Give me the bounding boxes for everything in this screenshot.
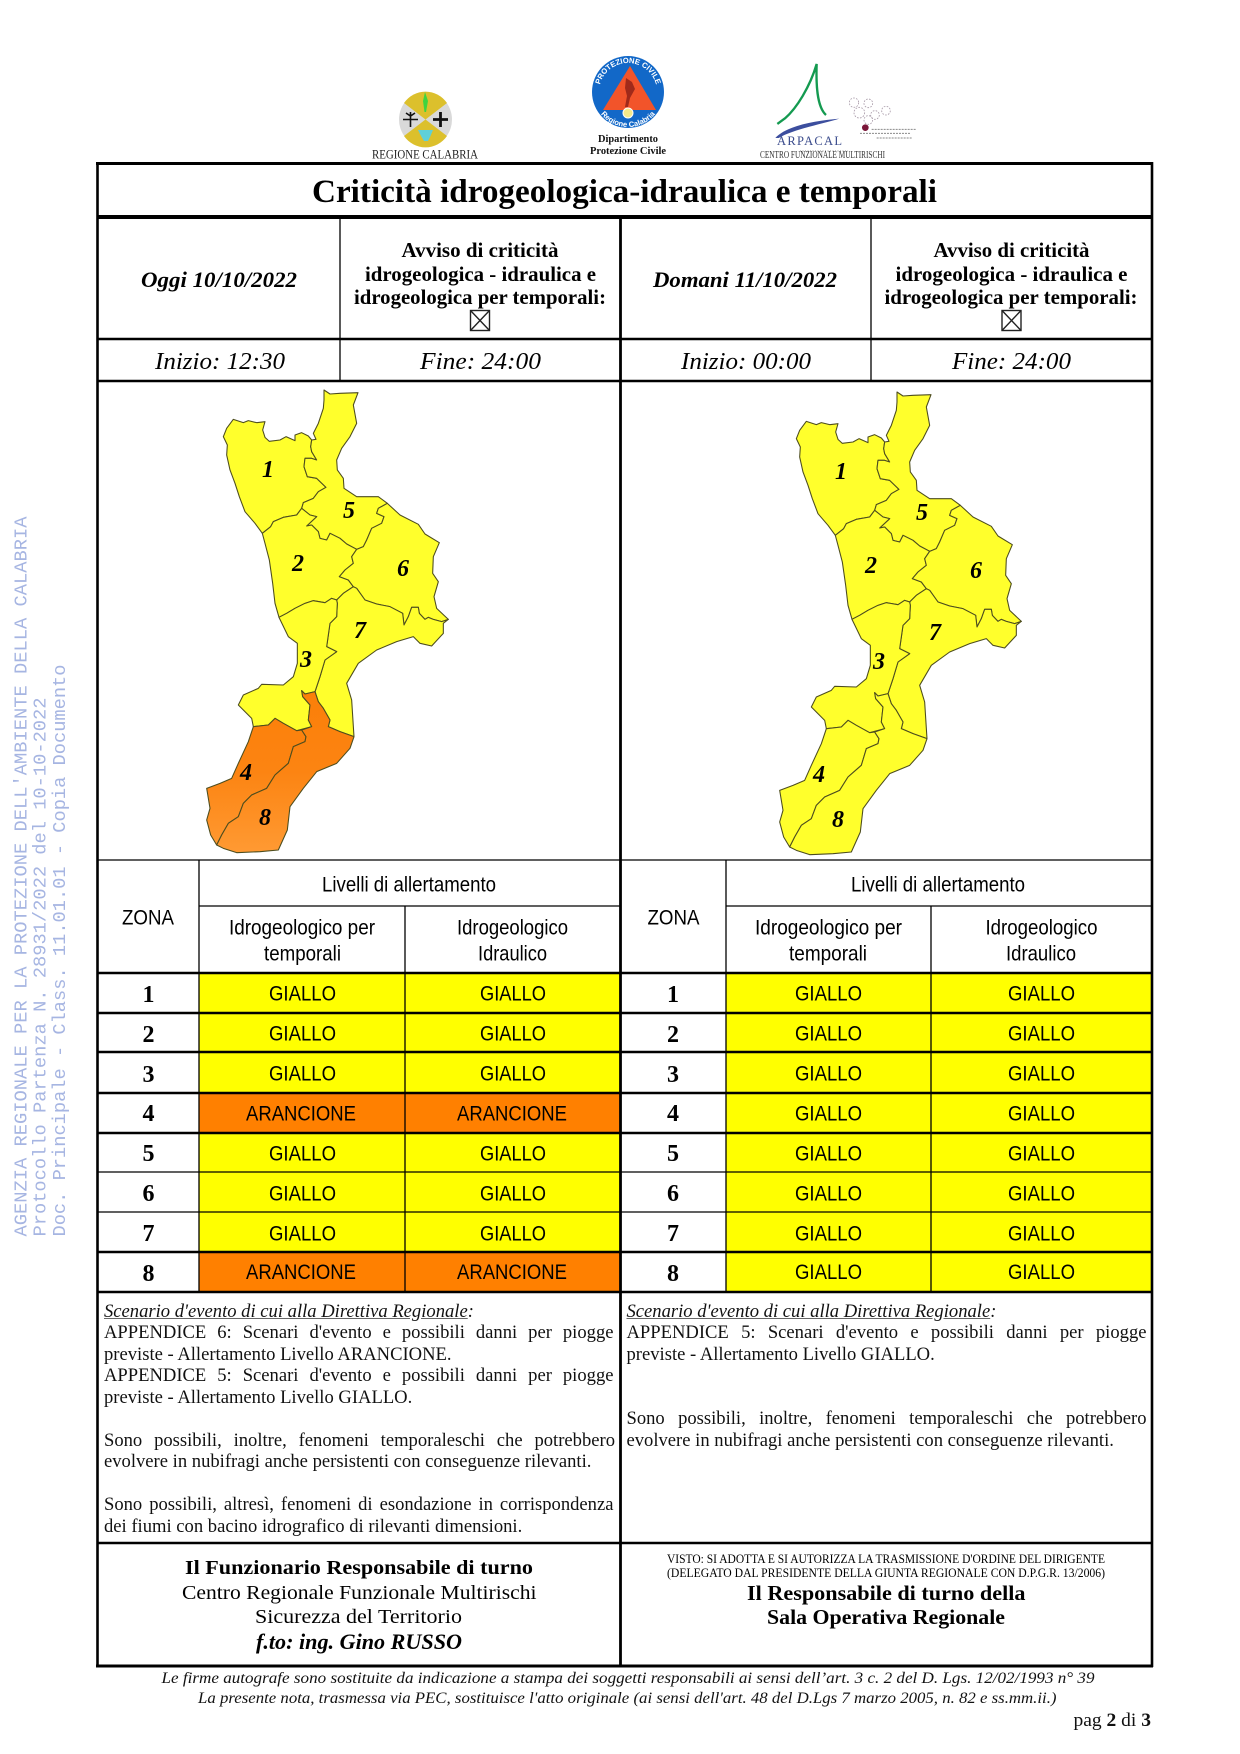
- alert values tomorrow: GIALLO: [795, 1102, 862, 1126]
- icon: checked box tomorrow: [1002, 310, 1021, 330]
- scenario text: today: dei fiumi con bacino idrografico di rilevanti dimensioni.: [104, 1516, 522, 1536]
- alert values tomorrow: GIALLO: [795, 982, 862, 1006]
- alert values today: GIALLO: [269, 1222, 336, 1246]
- signature: left: Centro Regionale Funzionale Multirischi: [182, 1582, 537, 1604]
- scenario text: tomorrow: APPENDICE 5: Scenari d'evento e possibili danni per piogge: [626, 1322, 1146, 1343]
- alert values today: GIALLO: [269, 982, 336, 1006]
- signature: left: Sicurezza del Territorio: [255, 1606, 462, 1628]
- zone numbers tomorrow: 2: [667, 1022, 679, 1048]
- vertical watermark: Protocollo Partenza N. 28931/2022 del 10-10-2022: [30, 698, 52, 1236]
- signature: right: Il Responsabile di turno della: [747, 1581, 1026, 1605]
- end time tomorrow: Fine: 24:00: [951, 349, 1071, 375]
- alert values tomorrow: GIALLO: [1008, 1182, 1075, 1206]
- scenario text: today: Sono possibili, altresì, fenomeni di esondazione in corrispondenza: [104, 1494, 614, 1515]
- table headings today: Livelli di allertamento: [322, 872, 496, 896]
- table headings tomorrow: Idrogeologico per: [755, 916, 902, 940]
- notice tomorrow: idrogeologica - idraulica e: [896, 262, 1128, 286]
- alert values today: GIALLO: [480, 1182, 546, 1206]
- footnote: La presente nota, trasmessa via PEC, sostituisce l'atto originale (ai sensi dell'art. 48 del D.Lgs 7 marzo 2005, n. 82 e ss.mm.ii.): [197, 1690, 1056, 1707]
- alert values today: GIALLO: [480, 1142, 546, 1166]
- alert values today: GIALLO: [480, 1062, 546, 1086]
- alert values today: GIALLO: [480, 1022, 546, 1046]
- panel: header today: [141, 238, 606, 375]
- zone numbers today: 5: [142, 1141, 154, 1167]
- zone numbers today: 8: [142, 1261, 154, 1287]
- signature: left: Il Funzionario Responsabile di turno: [185, 1557, 533, 1579]
- zone numbers today: 7: [142, 1221, 154, 1247]
- alert values today: ARANCIONE: [457, 1260, 567, 1284]
- map: tomorrow: 3: [872, 649, 885, 675]
- notice today: idrogeologica per temporali:: [354, 285, 606, 309]
- map: today: 1: [262, 457, 274, 483]
- alert values tomorrow: GIALLO: [795, 1222, 862, 1246]
- scenario text: today: previste - Allertamento Livello ARANCIONE.: [104, 1344, 452, 1364]
- alert values tomorrow: GIALLO: [1008, 1102, 1075, 1126]
- zone numbers tomorrow: 5: [667, 1141, 679, 1167]
- signature: right: Sala Operativa Regionale: [767, 1605, 1005, 1629]
- table headings today: temporali: [264, 942, 341, 966]
- logo: Protezione Civile: Protezione Civile: [590, 146, 666, 157]
- logo: Regione Calabria: [372, 92, 478, 162]
- scenario text: today: Sono possibili, inoltre, fenomeni temporaleschi che potrebbero: [104, 1430, 615, 1450]
- table headings tomorrow: Idraulico: [1006, 942, 1076, 966]
- start time tomorrow: Inizio: 00:00: [680, 349, 811, 375]
- alert values today: GIALLO: [480, 982, 546, 1006]
- scenario text: today: APPENDICE 5: Scenari d'evento e possibili danni per piogge: [104, 1365, 614, 1386]
- alert values tomorrow: GIALLO: [1008, 1260, 1075, 1284]
- table: today alert levels: [122, 872, 620, 1292]
- alert values today: GIALLO: [269, 1182, 336, 1206]
- panel: header tomorrow: [652, 238, 1138, 375]
- signature: right: VISTO: SI ADOTTA E SI AUTORIZZA LA TRASMISSIONE D'ORDINE DEL DIRIGENTE: [667, 1551, 1105, 1566]
- table headings today: Idrogeologico per: [229, 916, 375, 940]
- zone numbers today: [142, 982, 154, 1287]
- table headings today: Idrogeologico: [457, 916, 568, 940]
- table headings tomorrow: temporali: [789, 942, 867, 966]
- zone numbers tomorrow: 6: [667, 1181, 679, 1207]
- vertical watermark: AGENZIA REGIONALE PER LA PROTEZIONE DELL'AMBIENTE DELLA CALABRIA: [10, 516, 32, 1236]
- map: today: 2: [291, 551, 304, 577]
- notice today: Avviso di criticità: [402, 238, 559, 262]
- map: tomorrow: 7: [929, 620, 942, 646]
- zone numbers today: 1: [142, 982, 154, 1008]
- signature: left: [182, 1557, 537, 1654]
- map: tomorrow: 5: [916, 500, 928, 526]
- date tomorrow: Domani 11/10/2022: [652, 267, 837, 292]
- signature: right: [667, 1551, 1105, 1629]
- map: tomorrow: [780, 392, 1021, 855]
- alert values tomorrow: GIALLO: [795, 1142, 862, 1166]
- zone numbers today: 2: [142, 1022, 154, 1048]
- table headings today: Idraulico: [478, 942, 547, 966]
- zone numbers tomorrow: [667, 982, 679, 1287]
- logo: Protezione Civile: Regione Calabria: [601, 110, 656, 127]
- zone numbers today: 4: [142, 1101, 154, 1127]
- alert values tomorrow: GIALLO: [1008, 1142, 1075, 1166]
- title: Criticità idrogeologica-idraulica e temporali: [312, 174, 937, 210]
- logo: Regione Calabria: REGIONE CALABRIA: [372, 148, 478, 162]
- scenario text: tomorrow: [626, 1300, 1146, 1450]
- scenario text: tomorrow: Scenario d'evento di cui alla Direttiva Regionale:: [626, 1300, 996, 1322]
- table: tomorrow alert levels: [648, 872, 1152, 1292]
- date today: Oggi 10/10/2022: [141, 267, 297, 292]
- scenario text: tomorrow: previste - Allertamento Livello GIALLO.: [626, 1344, 935, 1364]
- map: tomorrow: 6: [970, 558, 982, 584]
- alert values tomorrow: GIALLO: [1008, 1022, 1075, 1046]
- zone numbers tomorrow: 1: [667, 982, 679, 1008]
- map: tomorrow: 1: [835, 459, 847, 485]
- zone numbers tomorrow: 4: [667, 1101, 679, 1127]
- footnote: [160, 1670, 1095, 1707]
- map: today: [207, 390, 448, 853]
- scenario text: today: APPENDICE 6: Scenari d'evento e possibili danni per piogge: [104, 1322, 614, 1343]
- zone numbers today: 3: [142, 1062, 154, 1088]
- map: today: 4: [239, 760, 252, 786]
- map: tomorrow: 4: [812, 762, 825, 788]
- map: today: 8: [259, 805, 271, 831]
- alert values today: GIALLO: [269, 1062, 336, 1086]
- table headings tomorrow: Livelli di allertamento: [851, 872, 1025, 896]
- zone numbers tomorrow: 8: [667, 1261, 679, 1287]
- map: today: 7: [354, 618, 367, 644]
- start time today: Inizio: 12:30: [154, 349, 285, 375]
- notice tomorrow: Avviso di criticità: [934, 238, 1090, 262]
- notice tomorrow: idrogeologica per temporali:: [884, 285, 1138, 309]
- table headings tomorrow: Idrogeologico: [986, 916, 1098, 940]
- vertical watermark: Doc. Principale - Class. 11.01.01 - Copia Documento: [49, 664, 71, 1236]
- notice tomorrow: [884, 238, 1138, 309]
- alert values tomorrow: GIALLO: [795, 1182, 862, 1206]
- zone numbers today: 6: [142, 1181, 154, 1207]
- scenario text: today: [104, 1300, 615, 1536]
- zone numbers tomorrow: 7: [667, 1221, 679, 1247]
- icon: checked box today: [470, 310, 490, 330]
- scenario text: today: evolvere in nubifragi anche persistenti con conseguenze rilevanti.: [104, 1451, 591, 1472]
- alert values today: GIALLO: [269, 1022, 336, 1046]
- signature: right: (DELEGATO DAL PRESIDENTE DELLA GIUNTA REGIONALE CON D.P.G.R. 13/2006): [667, 1565, 1105, 1580]
- alert values tomorrow: GIALLO: [1008, 1222, 1075, 1246]
- logo: Protezione Civile: Dipartimento: [598, 134, 658, 145]
- alert values today: [246, 982, 567, 1284]
- alert values today: ARANCIONE: [246, 1102, 356, 1126]
- table headings tomorrow: ZONA: [648, 906, 700, 930]
- table headings tomorrow: [648, 872, 1098, 966]
- notice today: idrogeologica - idraulica e: [365, 262, 596, 286]
- logo: ARPACAL: CENTRO FUNZIONALE MULTIRISCHI: [760, 150, 885, 161]
- alert values today: ARANCIONE: [246, 1260, 356, 1284]
- alert values today: GIALLO: [480, 1222, 546, 1246]
- logo: ARPACAL: ARPACAL: [777, 134, 842, 148]
- alert values tomorrow: GIALLO: [795, 1260, 862, 1284]
- logo: Protezione Civile: [590, 56, 666, 157]
- page number: pag 2 di 3: [1074, 1711, 1151, 1731]
- logo: Protezione Civile: PROTEZIONE CIVILE: [595, 58, 661, 84]
- signature: left: f.to: ing. Gino RUSSO: [256, 1629, 462, 1654]
- map: today: 5: [343, 498, 355, 524]
- vertical watermark: [10, 516, 71, 1236]
- alert values today: ARANCIONE: [457, 1102, 567, 1126]
- notice today: [354, 238, 606, 309]
- footnote: Le firme autografe sono sostituite da indicazione a stampa dei soggetti responsabili ai sensi dell’art. 3 c. 2 del D. Lgs. 12/02/1993 n° 39: [160, 1670, 1095, 1687]
- alert values tomorrow: GIALLO: [795, 1022, 862, 1046]
- logo: ARPACAL: [760, 64, 917, 161]
- scenario text: today: Scenario d'evento di cui alla Direttiva Regionale:: [104, 1300, 474, 1322]
- alert values tomorrow: GIALLO: [1008, 982, 1075, 1006]
- alert values today: GIALLO: [269, 1142, 336, 1166]
- alert values tomorrow: GIALLO: [1008, 1062, 1075, 1086]
- table headings today: [122, 872, 568, 966]
- alert values tomorrow: GIALLO: [795, 1062, 862, 1086]
- zone numbers tomorrow: 3: [667, 1062, 679, 1088]
- alert values tomorrow: [795, 982, 1075, 1284]
- end time today: Fine: 24:00: [419, 349, 541, 375]
- map: tomorrow: 8: [832, 807, 844, 833]
- scenario text: tomorrow: Sono possibili, inoltre, fenomeni temporaleschi che potrebbero: [626, 1408, 1146, 1429]
- map: tomorrow: 2: [864, 553, 877, 579]
- map: today: 3: [299, 647, 312, 673]
- map: today: 6: [397, 556, 409, 582]
- scenario text: today: previste - Allertamento Livello GIALLO.: [104, 1386, 412, 1408]
- table headings today: ZONA: [122, 906, 175, 930]
- scenario text: tomorrow: evolvere in nubifragi anche persistenti con conseguenze rilevanti.: [626, 1430, 1114, 1450]
